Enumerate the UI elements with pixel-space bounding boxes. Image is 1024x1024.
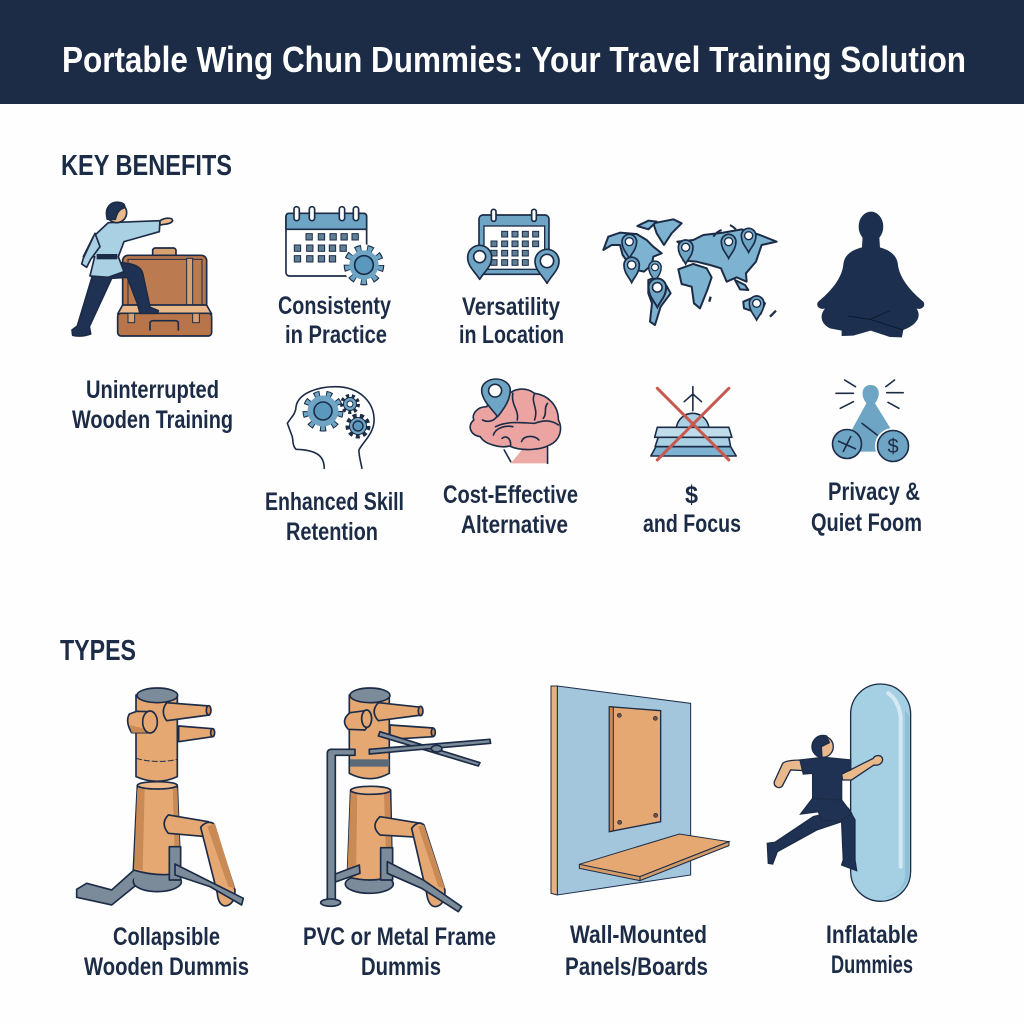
label	[303, 923, 496, 981]
icon: brain with pin	[470, 379, 561, 463]
label: $	[685, 481, 698, 509]
label: Cost-Effective	[443, 481, 578, 509]
benefit: privacy and quiet room	[811, 380, 922, 537]
illustration: wall panel and shelf	[551, 686, 729, 895]
label: Wooden Dummis	[84, 953, 249, 981]
heading: key benefits: KEY BENEFITS	[61, 150, 232, 182]
benefit: uninterrupted wooden training	[72, 202, 233, 434]
illustration: person striking inflatable bag	[767, 684, 911, 901]
type: wall-mounted panels	[551, 686, 729, 981]
label	[811, 478, 922, 537]
label: Collapsible	[113, 923, 220, 951]
label: Uninterrupted	[86, 376, 219, 404]
label: in Location	[459, 321, 564, 349]
label: Privacy &	[828, 478, 920, 506]
illustration: frame dummy	[321, 688, 491, 912]
benefit: dollar and focus	[643, 387, 741, 538]
label	[565, 921, 708, 981]
label: Dummis	[361, 953, 441, 981]
label: in Practice	[285, 321, 387, 349]
illustration: collapsible dummy	[77, 688, 243, 906]
label	[84, 923, 249, 981]
icon: meditating figure	[817, 212, 924, 337]
label	[265, 488, 404, 546]
benefit: consistency in practice	[278, 207, 391, 349]
icon: crossed-out monument	[651, 387, 736, 460]
label	[278, 292, 391, 349]
label: Versatility	[462, 293, 560, 321]
label: PVC or Metal Frame	[303, 923, 496, 951]
benefit: cost-effective alternative	[443, 379, 578, 539]
label: Wall-Mounted	[570, 921, 707, 949]
benefit: versatility in location	[459, 209, 564, 349]
icon: pawn figure with coins	[832, 380, 911, 464]
icon: world map with pins	[603, 219, 777, 325]
label: Inflatable	[826, 921, 918, 949]
label: Consistenty	[278, 292, 391, 320]
label: Quiet Foom	[811, 509, 922, 537]
icon: pawn figure with coins: $	[887, 436, 899, 458]
header banner	[0, 0, 1024, 104]
benefit: enhanced skill retention	[265, 387, 404, 546]
label	[643, 481, 741, 538]
label	[443, 481, 578, 539]
label: and Focus	[643, 510, 741, 538]
label: Dummies	[831, 951, 913, 979]
type: collapsible wooden dummies	[77, 688, 249, 981]
type: PVC or metal frame dummies	[303, 688, 496, 981]
label	[459, 293, 564, 349]
type: inflatable dummies	[767, 684, 918, 979]
label: Retention	[286, 518, 378, 546]
heading: types: TYPES	[60, 635, 136, 667]
icon: calendar and location pins	[468, 209, 559, 283]
icon: martial artist stepping on suitcase	[72, 202, 212, 336]
label	[826, 921, 918, 979]
label	[72, 376, 233, 434]
label: Panels/Boards	[565, 953, 708, 981]
label: Wooden Training	[72, 406, 233, 434]
icon: calendar and gear	[286, 207, 385, 286]
label: Alternative	[461, 511, 568, 539]
label: Enhanced Skill	[265, 488, 404, 516]
icon: head with gears	[287, 387, 374, 468]
